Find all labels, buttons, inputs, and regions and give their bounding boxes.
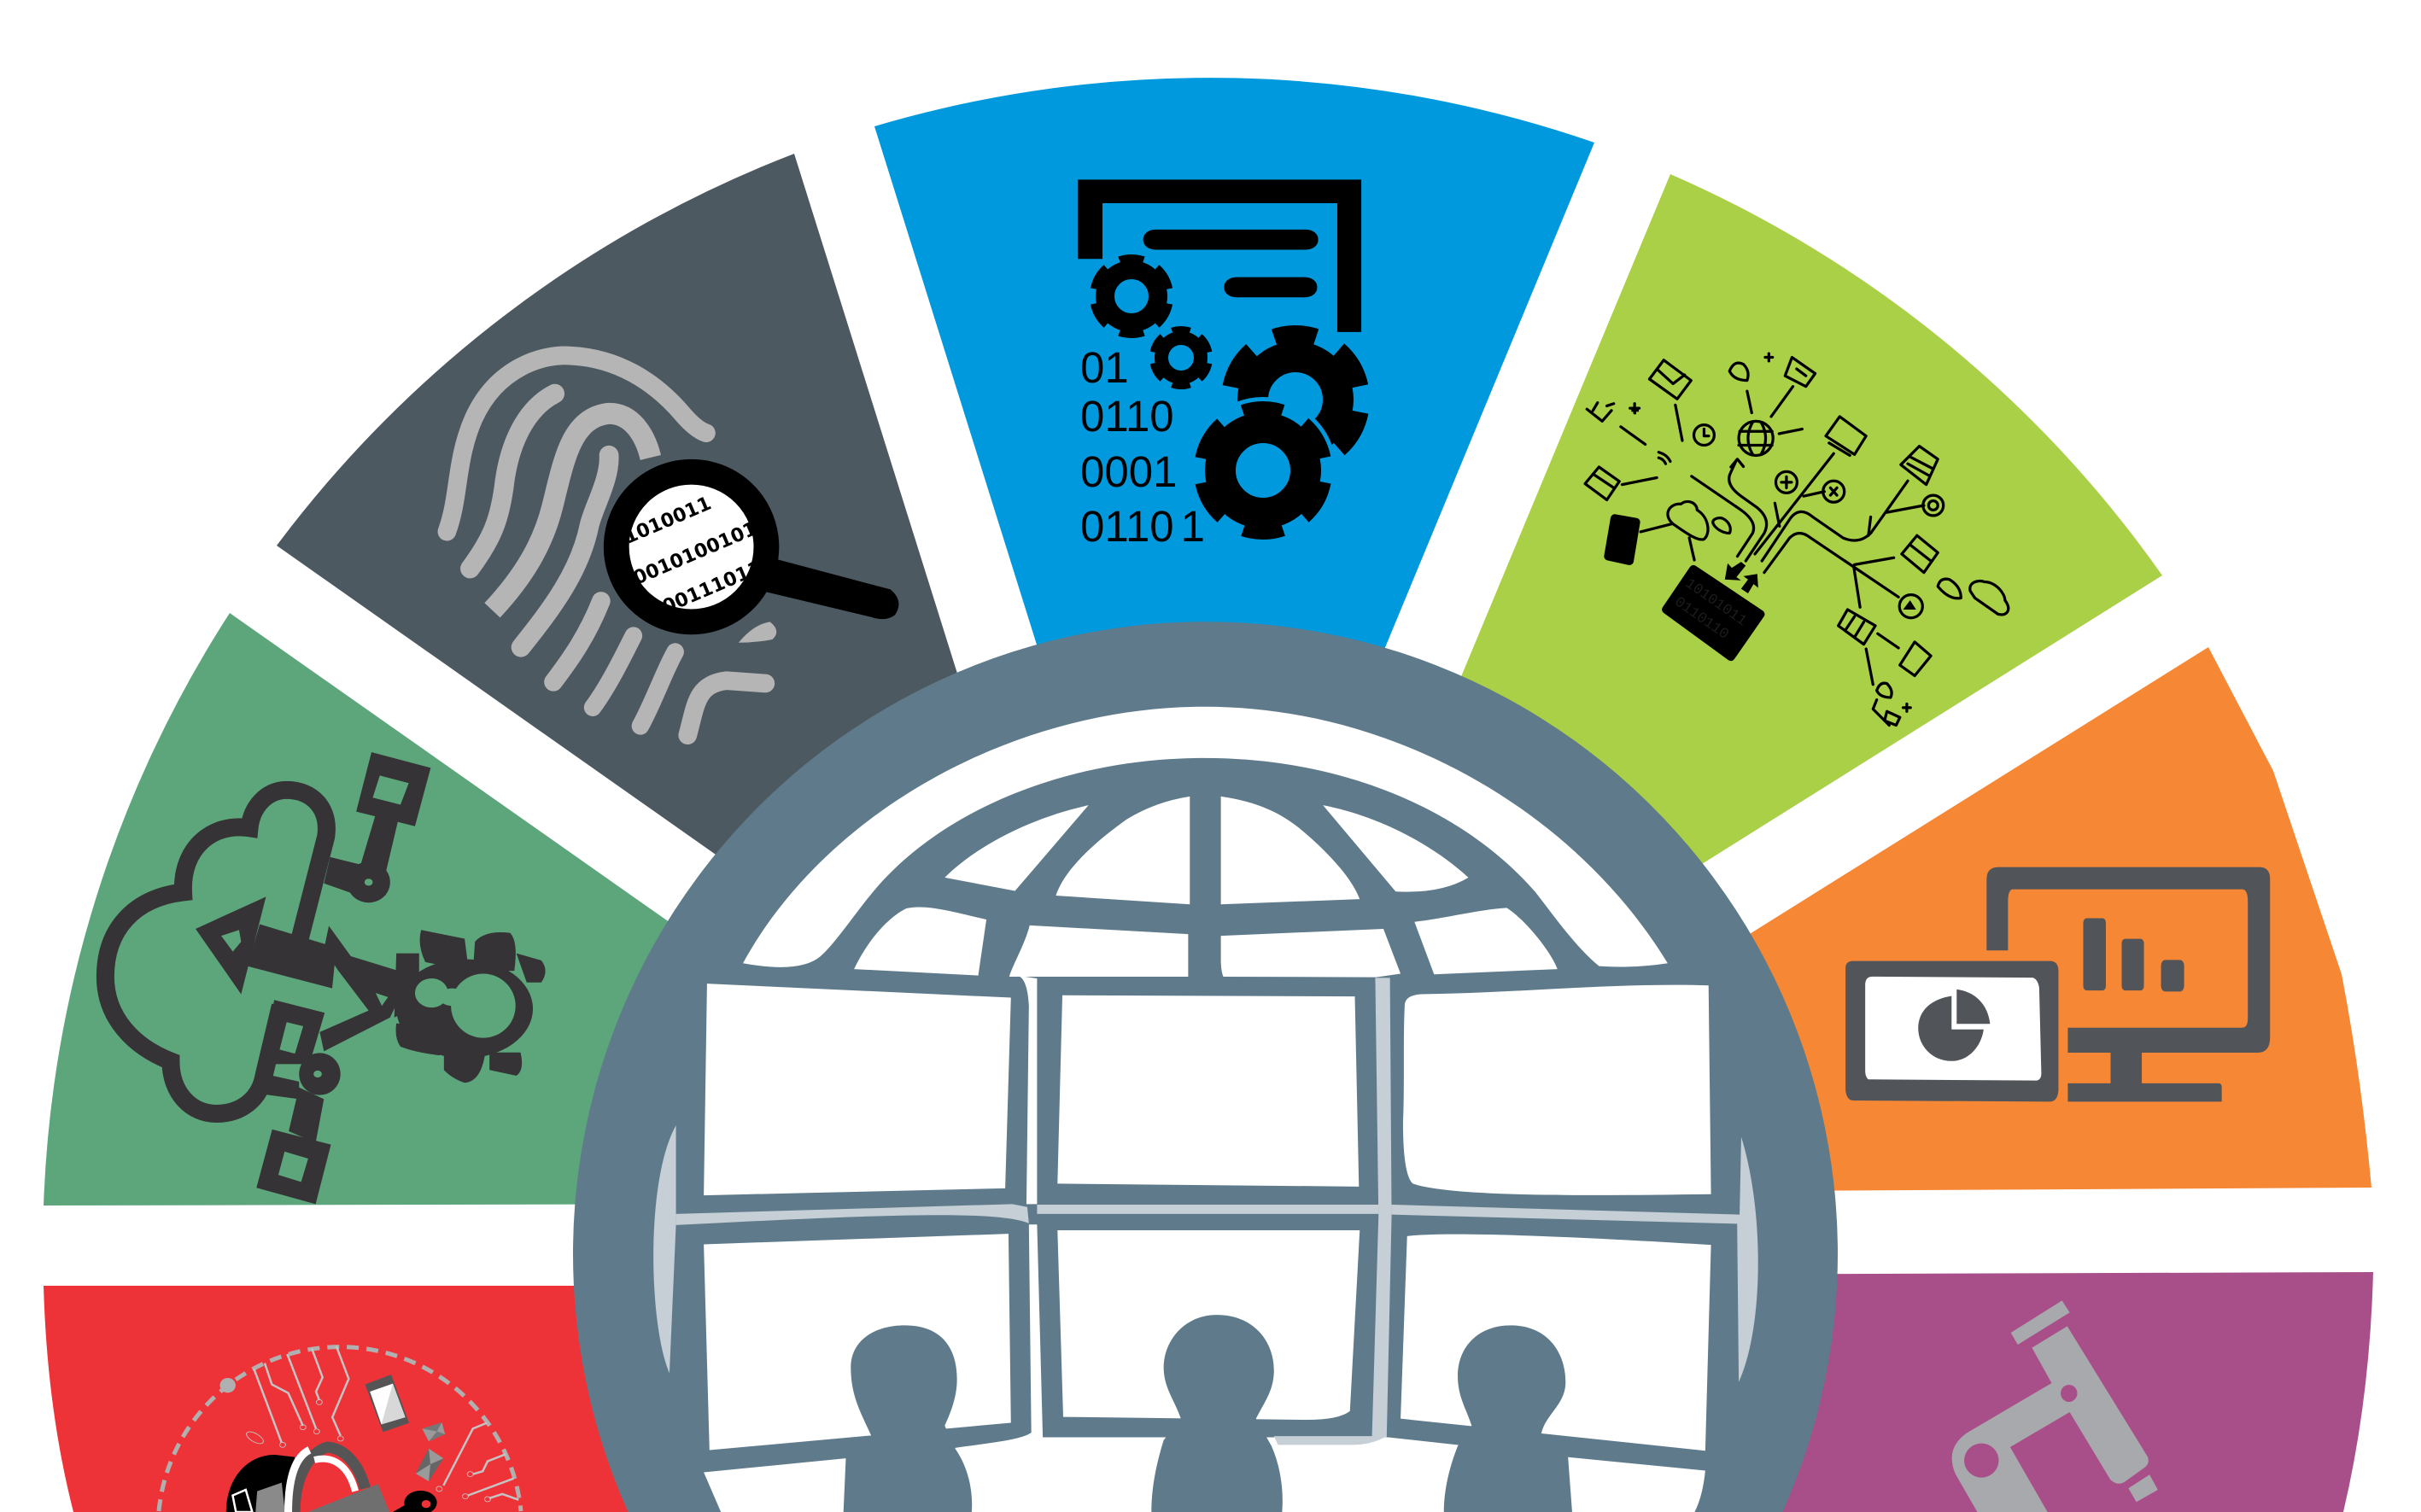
icon: connected devices tree: 10101011	[1681, 576, 1749, 630]
binary digits: 01101	[1080, 502, 1205, 551]
central emblem: globe and video wall	[573, 622, 1838, 1512]
icon: dashed security circuit ring	[159, 1346, 521, 1512]
icon: fingerprint under magnifier: 00111011	[659, 557, 765, 618]
icon: fingerprint under magnifier: 0010100101	[630, 517, 760, 590]
icon: connected devices tree: 0110110	[1671, 594, 1731, 644]
icon: monitors with charts	[1845, 867, 2270, 1101]
icon: fingerprint under magnifier	[447, 355, 898, 735]
binary digits: 01	[1080, 343, 1129, 392]
binary digits	[1080, 343, 1205, 551]
icon: fingerprint under magnifier: 1010011	[621, 493, 715, 549]
ring disc	[573, 622, 1838, 1512]
panel: blue data processing wedge	[874, 78, 1594, 797]
icon: cloud with arrows and gear	[105, 752, 546, 1204]
globe: white dome and cells	[743, 707, 1668, 978]
panel: orange dashboard wedge	[1623, 647, 2371, 1192]
icon: connected devices tree	[1585, 353, 2009, 725]
video wall windows	[704, 976, 1711, 1512]
audience silhouettes	[844, 1315, 1572, 1512]
icon: gears	[1088, 253, 1372, 544]
panel: red security wedge	[44, 1286, 769, 1512]
icon: microscope	[1952, 1300, 2158, 1512]
binary digits: 0001	[1080, 447, 1177, 496]
panel: grey fingerprint wedge	[277, 154, 957, 855]
icon: document frame	[1078, 179, 1361, 332]
panel: purple microscope wedge	[1623, 1272, 2373, 1512]
panel: green cloud workflow wedge	[44, 613, 854, 1206]
light grey highlights	[653, 978, 1758, 1445]
panel: lime network wedge	[1401, 174, 2162, 967]
binary digits: 0110	[1080, 392, 1174, 441]
